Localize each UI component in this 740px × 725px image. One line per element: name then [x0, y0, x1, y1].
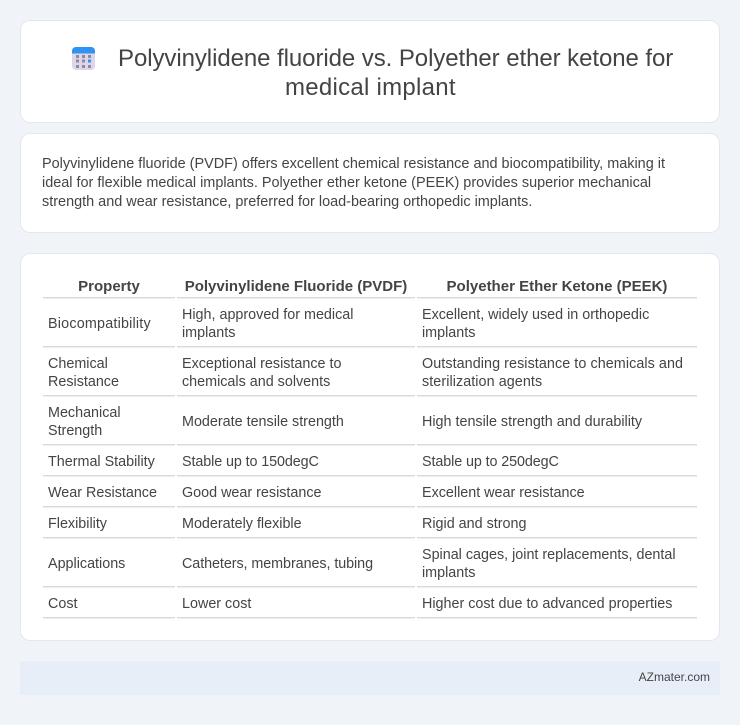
summary text: Polyvinylidene fluoride (PVDF) offers excellent chemical resistance and biocompatibility, making it [42, 156, 665, 172]
row: Applications: Catheters, membranes, tubing [182, 556, 373, 572]
row: Thermal Stability: Stable up to 150degC [182, 454, 319, 470]
row: Applications: Spinal cages, joint replacements, dental [422, 547, 676, 563]
row: Wear Resistance [48, 485, 585, 501]
row: Flexibility: Flexibility [48, 516, 107, 532]
table header: Polyvinylidene Fluoride (PVDF) [185, 278, 407, 294]
row: Biocompatibility: implants [422, 325, 475, 341]
row: Wear Resistance: Good wear resistance [182, 485, 322, 501]
title text: medical implant [285, 74, 456, 101]
panel: summary [20, 133, 720, 233]
row: Cost: Higher cost due to advanced properties [422, 596, 672, 612]
table header [78, 278, 667, 294]
title text: Polyvinylidene fluoride vs. Polyether ether ketone for [118, 45, 673, 72]
row: Mechanical Strength: Strength [48, 423, 102, 439]
row: Biocompatibility [48, 307, 649, 341]
row: Chemical Resistance: Chemical [48, 356, 108, 372]
row: Mechanical Strength: High tensile strength and durability [422, 414, 642, 430]
row: Chemical Resistance [48, 356, 683, 390]
footer bar [20, 661, 720, 695]
footer credit: AZmater.com [639, 670, 710, 684]
panel: comparison table [20, 253, 720, 641]
panel: title [20, 20, 720, 123]
row: Flexibility: Moderately flexible [182, 516, 302, 532]
row: Mechanical Strength: Moderate tensile strength [182, 414, 344, 430]
table header: Property [78, 278, 140, 294]
row: Chemical Resistance: Exceptional resistance to [182, 356, 341, 372]
summary text: ideal for flexible medical implants. Polyether ether ketone (PEEK) provides superior mechanical [42, 175, 651, 191]
row: Wear Resistance: Wear Resistance [48, 485, 157, 501]
row: Cost [48, 596, 672, 612]
row: Thermal Stability: Stable up to 250degC [422, 454, 559, 470]
row: Mechanical Strength [48, 405, 642, 439]
row: Chemical Resistance: Outstanding resistance to chemicals and [422, 356, 683, 372]
summary text: strength and wear resistance, preferred for load-bearing orthopedic implants. [42, 194, 532, 210]
row: Applications: Applications [48, 556, 125, 572]
row: Biocompatibility: Excellent, widely used in orthopedic [422, 307, 649, 323]
row: Chemical Resistance: sterilization agents [422, 374, 542, 390]
table header: Polyether Ether Ketone (PEEK) [447, 278, 667, 294]
summary text [42, 156, 665, 210]
row: Biocompatibility: implants [182, 325, 235, 341]
row: Biocompatibility: High, approved for medical [182, 307, 353, 323]
row: Cost: Cost [48, 596, 78, 612]
row: Flexibility [48, 516, 526, 532]
row: Biocompatibility: Biocompatibility [48, 316, 151, 332]
title text [118, 45, 673, 101]
row: Chemical Resistance: chemicals and solvents [182, 374, 330, 390]
row: Mechanical Strength: Mechanical [48, 405, 121, 421]
row: Chemical Resistance: Resistance [48, 374, 119, 390]
row: Applications: implants [422, 565, 475, 581]
row: Thermal Stability [48, 454, 559, 470]
row: Applications [48, 547, 676, 581]
row: Flexibility: Rigid and strong [422, 516, 526, 532]
row: Thermal Stability: Thermal Stability [48, 454, 155, 470]
icon: calendar [72, 47, 95, 70]
row: Wear Resistance: Excellent wear resistance [422, 485, 585, 501]
row: Cost: Lower cost [182, 596, 251, 612]
